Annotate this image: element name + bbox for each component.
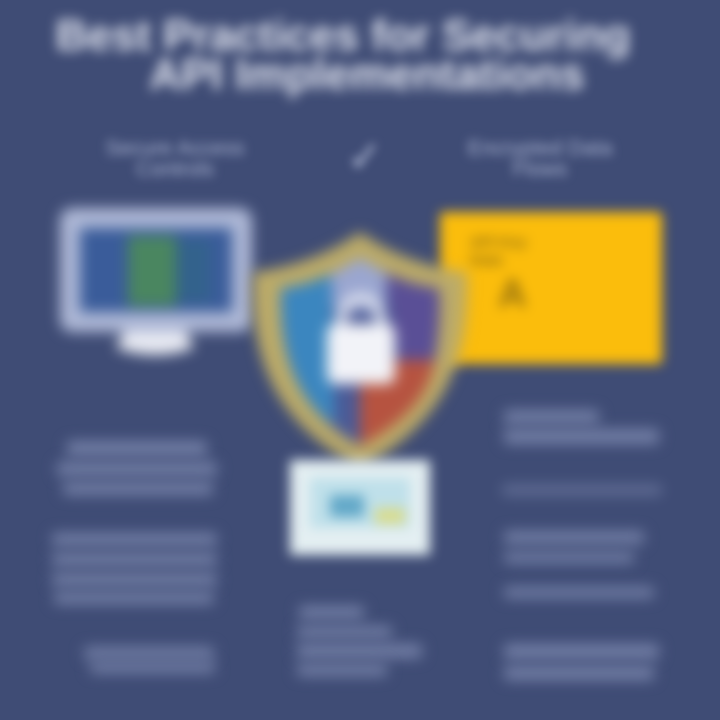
right text block 2 <box>500 524 658 604</box>
left text block 3 <box>80 640 220 680</box>
title <box>50 11 636 104</box>
icon: document panel <box>280 450 440 564</box>
icon: monitor <box>50 198 262 366</box>
left text block 2 <box>48 526 222 610</box>
icon: shield with lock <box>244 226 476 466</box>
card symbol: A <box>498 272 527 316</box>
card text: API Key Data <box>470 234 527 269</box>
left column heading: Secure Access Controls <box>106 137 244 181</box>
right text block 3 <box>499 638 664 686</box>
center icon: ✓ <box>347 133 383 180</box>
left text block 1 <box>52 434 222 502</box>
title: API Implementations <box>149 50 585 99</box>
right text block 1 <box>499 404 664 500</box>
title: Best Practices for Securing <box>56 11 630 60</box>
right column heading: Encrypted Data Flows <box>468 137 612 181</box>
center text block <box>292 600 426 682</box>
panel: yellow card <box>440 212 662 364</box>
